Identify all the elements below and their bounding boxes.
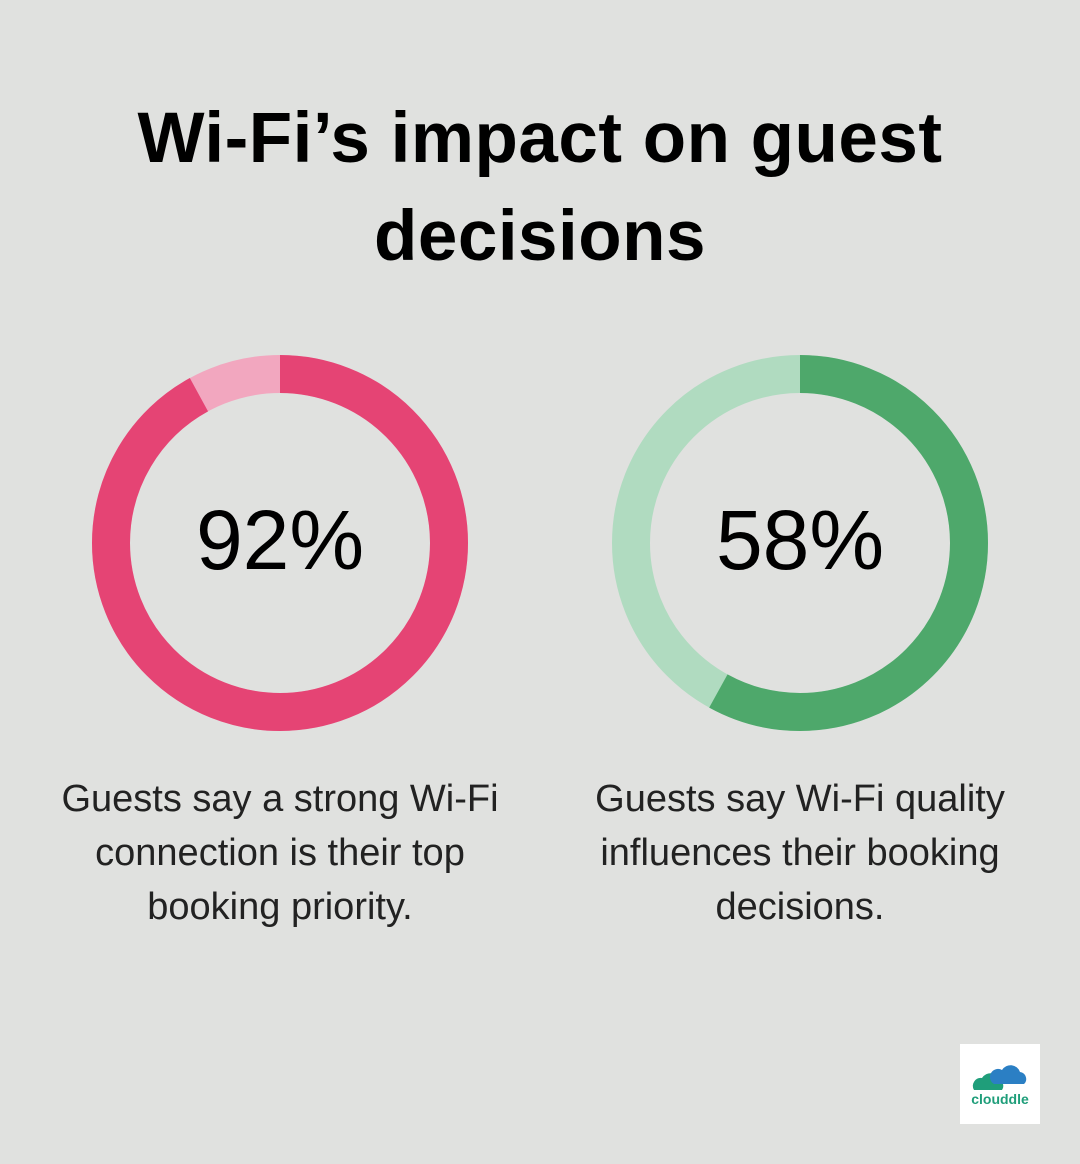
chart: 92% donut [92, 355, 468, 731]
caption right: decisions. [716, 886, 884, 928]
caption left: booking priority. [147, 886, 413, 928]
title: decisions [374, 197, 706, 276]
caption right [595, 778, 1005, 928]
stat: 92%: 92% [196, 493, 364, 587]
logo: clouddle [960, 1044, 1040, 1124]
caption right: Guests say Wi-Fi quality [595, 778, 1005, 820]
stat: 58%: 58% [716, 493, 884, 587]
caption right: influences their booking [600, 832, 1000, 874]
caption left: Guests say a strong Wi-Fi [61, 778, 499, 820]
title: Wi-Fi’s impact on guest [137, 99, 943, 178]
caption left [61, 778, 499, 928]
caption left: connection is their top [95, 832, 465, 874]
title [137, 99, 943, 276]
chart: 58% donut [612, 355, 988, 731]
logo: clouddle: clouddle [971, 1091, 1029, 1107]
